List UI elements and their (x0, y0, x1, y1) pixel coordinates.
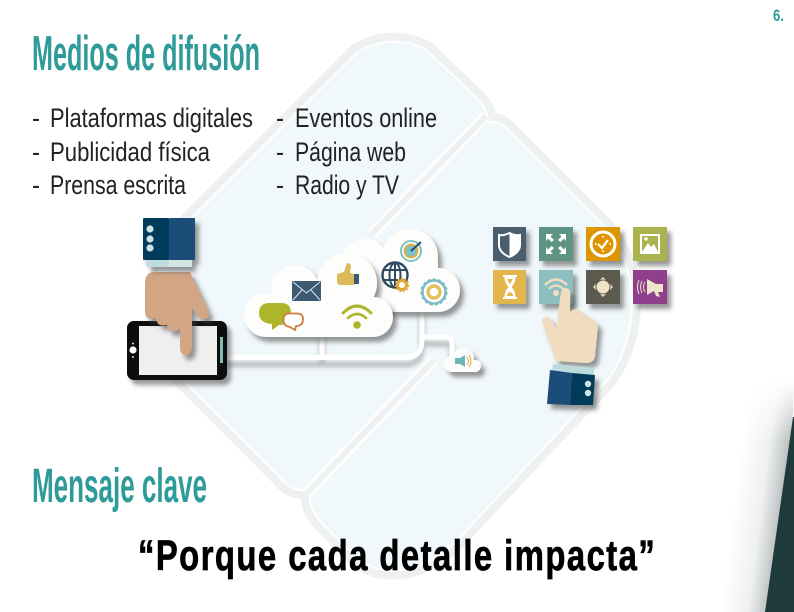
list: media channels, left column: - (32, 103, 40, 133)
icon: megaphone tile (633, 270, 667, 304)
shirt cuff, dark (143, 218, 195, 267)
icon: wifi tile (539, 270, 573, 304)
icon: large gear (422, 280, 446, 304)
connector wires (225, 305, 452, 358)
shirt cuff, dark (547, 370, 595, 405)
icon: clock check (586, 227, 620, 261)
icon: envelope (292, 281, 321, 301)
icon: speech bubbles (259, 303, 303, 330)
app icon grid (493, 227, 667, 304)
key message quote: “Porque cada detalle impacta” (138, 533, 655, 580)
icon: expand arrows (539, 227, 573, 261)
title: Medios de difusión: Medios de difusión (32, 27, 260, 81)
page number: 6. (773, 6, 784, 25)
list: media channels, right column: - (276, 137, 284, 167)
pointing hand (145, 272, 209, 355)
cloud: front, with chat, mail, like and wifi (244, 253, 393, 337)
list: media channels, left column: Prensa escrita (50, 170, 187, 200)
icon: target (401, 241, 421, 261)
list: media channels, left column: - (32, 137, 40, 167)
icon: speaker (455, 355, 471, 367)
corner accent: dark teal wedge with shadow (734, 388, 794, 612)
icon: target tile (586, 270, 620, 304)
list: media channels, right column: - (276, 103, 284, 133)
list: media channels, right column: - (276, 170, 284, 200)
list: media channels, left column (32, 103, 253, 200)
illustration: left hand on tablet (127, 218, 227, 380)
list: media channels, left column: Plataformas digitales (50, 103, 253, 133)
list: media channels, left column: Publicidad física (50, 137, 211, 167)
icon: picture (633, 227, 667, 261)
cloud: back, with target, globe and gear (341, 229, 460, 312)
icon: wifi (343, 306, 371, 329)
list: media channels, right column: Radio y TV (295, 170, 399, 200)
shirt cuff, light strip (552, 364, 594, 376)
icon: shield (493, 227, 526, 261)
list: media channels, left column: - (32, 170, 40, 200)
tablet (127, 321, 227, 380)
icon: hourglass (493, 270, 526, 304)
list: media channels, right column: Página web (295, 137, 406, 167)
cloud: small, with speaker (444, 348, 481, 372)
heading: Mensaje clave: Mensaje clave (32, 460, 207, 513)
list: media channels, right column: Eventos online (295, 103, 437, 133)
illustration: right hand tapping tile (542, 288, 598, 405)
icon: globe (382, 262, 408, 291)
pointing hand (542, 288, 598, 363)
icon: thumbs up (337, 263, 359, 285)
background: rounded diamond panels (161, 43, 631, 570)
list: media channels, right column (276, 103, 437, 200)
